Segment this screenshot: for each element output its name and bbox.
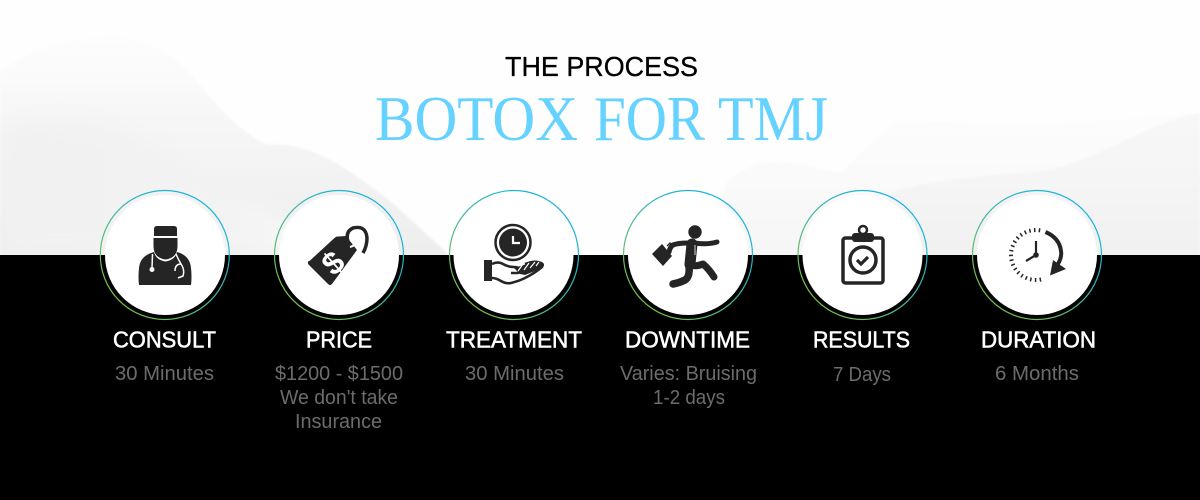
title: botox for tmj: TMJ [718,84,828,154]
icon: doctor [138,226,192,285]
step: downtime [620,190,757,409]
title: botox for tmj: BOTOX [375,84,578,154]
title: botox for tmj: FOR [594,84,705,154]
label: duration: DURATION [981,326,1096,352]
icon: price tag [308,227,367,285]
detail: price: Insurance [295,411,382,433]
ring and disc [450,190,578,320]
step: treatment [446,190,582,385]
detail: downtime: 1-2 days [653,387,725,409]
label: results: RESULTS [813,326,910,352]
ring and disc [798,190,927,320]
label: price: PRICE [306,326,372,352]
step: results [798,190,927,386]
detail: price: $1200 - $1500 [275,363,403,385]
detail: duration: 6 Months [995,363,1079,385]
background: white wave area [0,0,1200,256]
label: consult: CONSULT [113,326,216,352]
icon: price tag: $ [314,244,352,282]
detail: price [275,363,403,433]
ring and disc [100,190,229,320]
heading: the process: THE PROCESS [505,51,698,82]
ring and disc [624,190,752,320]
icon: clock with arrow [1009,228,1066,282]
detail: downtime: Varies: Bruising [620,363,757,385]
black lower band [0,255,1200,500]
detail: consult: 30 Minutes [115,363,214,385]
detail: treatment: 30 Minutes [465,363,564,385]
label: downtime: DOWNTIME [625,326,750,352]
icon: clipboard with check [843,226,883,283]
title: botox for tmj [375,84,828,154]
detail: results: 7 Days [833,364,891,386]
icon: running businessman [652,225,717,284]
label: treatment: TREATMENT [446,326,582,352]
ring and disc [972,190,1102,320]
detail: price: We don't take [280,387,398,409]
detail: downtime [620,363,757,409]
icon: clock on hand [484,225,543,283]
step: price [274,190,404,433]
ring and disc [274,190,404,320]
step: duration [972,190,1102,385]
step: consult [100,190,229,385]
